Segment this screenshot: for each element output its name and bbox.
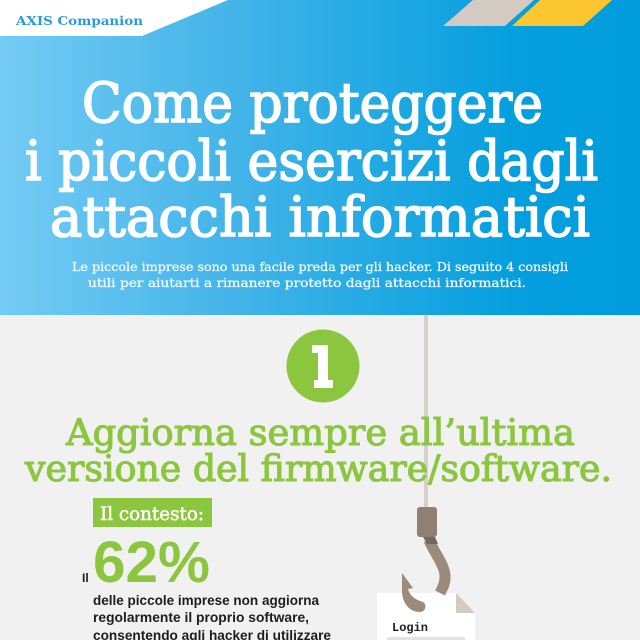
title: Come proteggere: [82, 71, 543, 135]
decorative parallelograms: [443, 0, 612, 26]
statistic: 62%: [93, 530, 210, 595]
illustration: hook with login page: [377, 507, 475, 640]
statistic: Il: [82, 571, 89, 585]
statistic description: delle piccole imprese non aggiorna: [93, 593, 319, 608]
subtitle: utili per aiutarti a rimanere protetto dagli attacchi informatici.: [88, 276, 526, 290]
fishing line: [424, 315, 428, 507]
subtitle: [72, 260, 568, 290]
context label: [93, 498, 212, 527]
login field: [387, 637, 465, 640]
step heading: versione del firmware/software.: [24, 449, 612, 490]
title: i piccoli esercizi dagli: [25, 129, 598, 193]
statistic description: [93, 593, 331, 640]
step number badge: [286, 330, 360, 402]
login label: Login: [392, 621, 428, 635]
step heading: [24, 413, 612, 490]
title: attacchi informatici: [50, 185, 590, 249]
context label: Il contesto:: [100, 503, 204, 525]
title: [25, 71, 598, 249]
statistic description: regolarmente il proprio software,: [93, 610, 309, 625]
logo text: AXIS Companion: [15, 13, 143, 28]
subtitle: Le piccole imprese sono una facile preda per gli hacker. Di seguito 4 consigli: [72, 260, 568, 274]
panel: blue header: [0, 0, 640, 315]
numeral 1: [312, 345, 333, 388]
logo tab: [0, 0, 228, 36]
hook: [402, 507, 445, 612]
step heading: Aggiorna sempre all’ultima: [65, 413, 575, 454]
